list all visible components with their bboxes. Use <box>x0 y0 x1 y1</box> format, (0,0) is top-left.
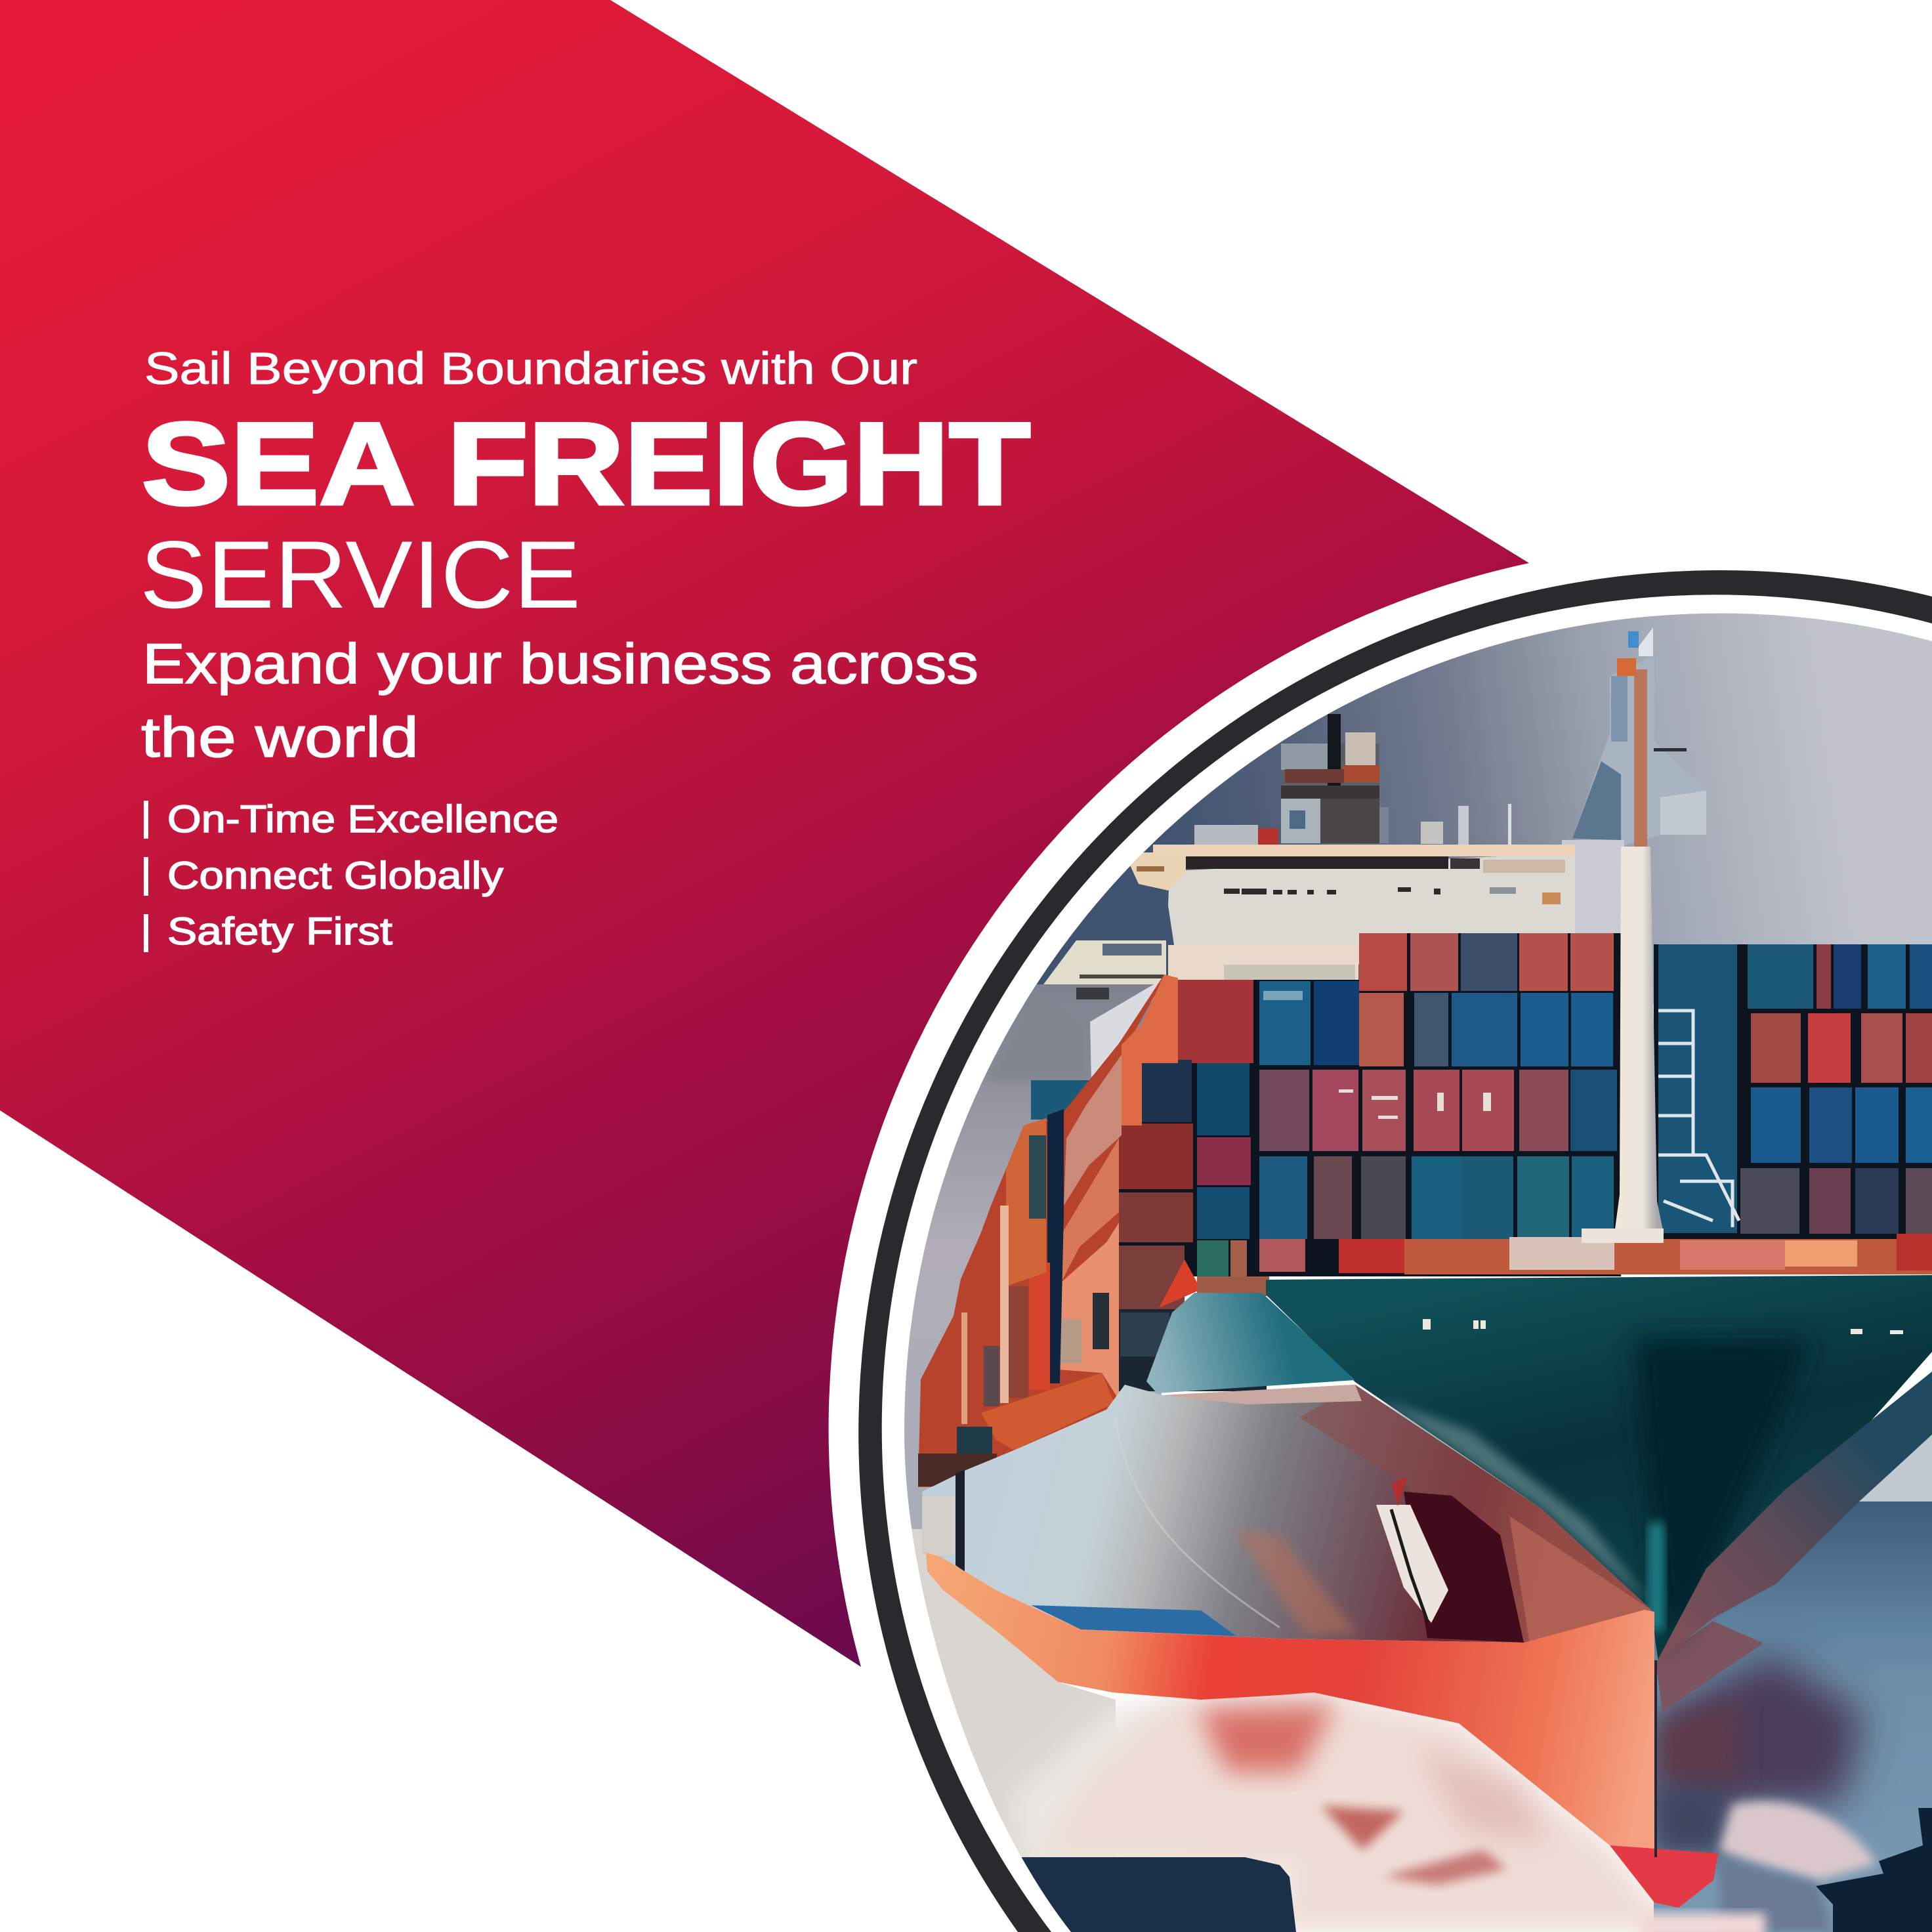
ladder lattice <box>1658 1011 1739 1227</box>
hull left edge highlight <box>1378 1398 1654 1608</box>
lower left sky <box>899 984 1162 1542</box>
deck cargo strip <box>1404 1228 1932 1274</box>
hull grey side <box>922 1385 1654 1643</box>
text block <box>140 343 1030 953</box>
list item 2: Connect Globally <box>167 854 503 897</box>
subtitle: service: SERVICE <box>140 521 581 628</box>
ship mast lattice <box>1572 627 1706 853</box>
panel: red arrow shape <box>0 0 1529 1667</box>
hull lights <box>1423 1319 1903 1334</box>
ring: dark circular frame <box>858 570 1932 1932</box>
hull centre shadow <box>1634 1339 1811 1647</box>
photo: container ship in circle <box>899 610 1932 1932</box>
pale wall behind mast <box>1562 840 1624 933</box>
hull dark arch <box>1404 1492 1524 1643</box>
orange stacked side <box>918 975 1178 1487</box>
tagline line two: the world <box>141 706 419 769</box>
hull upper dark teal <box>1266 1275 1932 1662</box>
list bar 2 <box>144 857 148 896</box>
container stacks left of mast <box>1118 933 1621 1309</box>
hull right flare <box>1656 1372 1932 1664</box>
list bar 1 <box>144 801 148 839</box>
foam bulge <box>1037 1688 1772 1932</box>
pale wing right part <box>1090 980 1160 1078</box>
stem line <box>1654 1660 1657 1857</box>
tagline line one: Expand your business across <box>142 633 978 696</box>
sea right of stem <box>1641 1431 1932 1932</box>
blue container on stack <box>1031 1080 1095 1120</box>
prow tip <box>1610 1845 1718 1908</box>
intro line: Sail Beyond Boundaries with Our <box>144 343 917 394</box>
title: sea freight: SEA FREIGHT <box>142 398 1030 529</box>
ship bridge tower <box>1194 714 1511 845</box>
bridge wing railing <box>1043 940 1166 999</box>
list item 1: On-Time Excellence <box>167 798 558 841</box>
white mast <box>1614 847 1664 1234</box>
pale hull wing <box>984 1005 1089 1080</box>
sky <box>1024 613 1932 1004</box>
list item 3: Safety First <box>167 910 392 953</box>
teal stem glow <box>1648 1522 1664 1631</box>
container stacks right of mast <box>1654 944 1932 1240</box>
list bar 3 <box>144 914 148 952</box>
dark water bottom left <box>1017 1857 1296 1932</box>
superstructure <box>1124 845 1575 984</box>
anchor <box>1376 1477 1448 1623</box>
water left of hull <box>899 1529 1280 1932</box>
hull orange-red waterline <box>926 1553 1654 1855</box>
lower dark cargo <box>1119 1276 1269 1391</box>
bulbous teal deck <box>1146 1293 1355 1393</box>
